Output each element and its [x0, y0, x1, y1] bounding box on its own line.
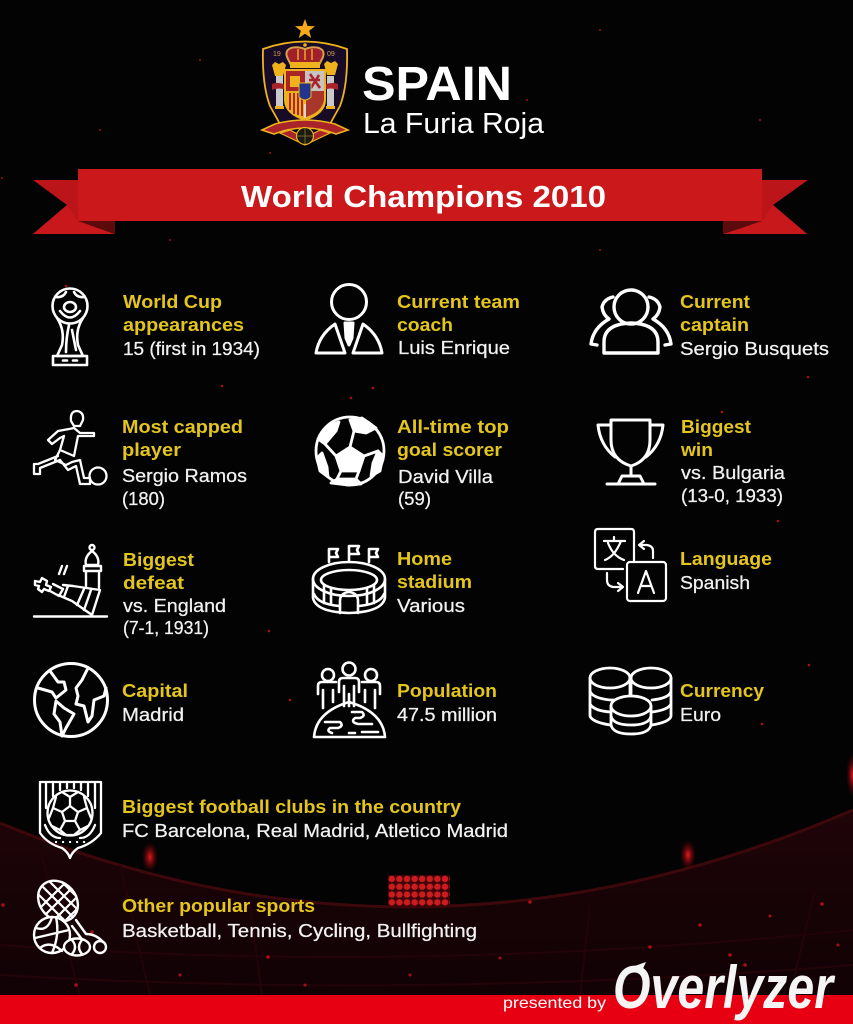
- icon: cup: [598, 420, 663, 484]
- item: world cup appearances: World Cup: [123, 292, 222, 312]
- icon: globe: [34, 664, 108, 736]
- item: biggest defeat: Biggest: [123, 550, 194, 570]
- item: population: 47.5 million: [397, 705, 497, 725]
- icon: football: [316, 417, 384, 485]
- icon: star: [295, 19, 315, 38]
- crest: Spain football federation: 19: [273, 51, 281, 58]
- item: biggest win: (13-0, 1933): [681, 486, 783, 506]
- item: biggest football clubs: FC Barcelona, Real Madrid, Atletico Madrid: [122, 821, 508, 841]
- item: home stadium: [313, 546, 472, 616]
- item: current captain: captain: [680, 315, 749, 335]
- item: other popular sports: Other popular sports: [122, 896, 315, 916]
- item: current captain: Sergio Busquets: [680, 339, 829, 359]
- icon: coin stacks: [590, 668, 671, 734]
- item: biggest football clubs: [40, 782, 508, 858]
- item: biggest football clubs: Biggest football clubs in the country: [122, 797, 461, 817]
- item: biggest win: Biggest: [681, 417, 751, 437]
- item: language: Language: [680, 549, 772, 569]
- presented by: presented by: [503, 995, 606, 1012]
- banner heading: World Champions 2010: [241, 179, 606, 214]
- item: all-time top goal scorer: [316, 417, 509, 509]
- item: home stadium: Home: [397, 549, 452, 569]
- item: language: Spanish: [680, 573, 750, 593]
- icon: footballer kicking: [34, 411, 106, 484]
- item: home stadium: Various: [397, 596, 465, 616]
- item: current captain: [591, 290, 829, 359]
- icon: group of people: [591, 290, 671, 353]
- item: other popular sports: Basketball, Tennis, Cycling, Bullfighting: [122, 921, 477, 941]
- item: population: Population: [397, 681, 497, 701]
- item: capital: Capital: [122, 681, 188, 701]
- icon: fallen chess king: [34, 545, 107, 616]
- item: language: [595, 529, 772, 601]
- item: home stadium: stadium: [397, 572, 472, 592]
- item: current captain: Current: [680, 292, 750, 312]
- icon: translate: [595, 529, 666, 601]
- item: biggest defeat: [34, 545, 226, 638]
- item: current team coach: [316, 284, 520, 358]
- item: all-time top goal scorer: (59): [398, 489, 431, 509]
- subtitle: La Furia Roja: [363, 108, 545, 140]
- item: most capped player: [34, 411, 247, 509]
- item: biggest win: [598, 417, 786, 506]
- item: most capped player: player: [122, 440, 181, 460]
- title: [362, 58, 545, 140]
- item: most capped player: Sergio Ramos: [122, 466, 247, 486]
- item: biggest defeat: defeat: [123, 573, 184, 593]
- footer bar: [0, 954, 853, 1024]
- item: world cup appearances: [52, 288, 260, 365]
- icon: stadium: [313, 546, 385, 613]
- item: currency: Euro: [680, 705, 721, 725]
- item: biggest defeat: (7-1, 1931): [123, 618, 209, 638]
- icon: racket and balls: [30, 873, 106, 956]
- item: current team coach: Current team: [397, 292, 520, 312]
- item: biggest win: vs. Bulgaria: [681, 463, 786, 483]
- item: most capped player: Most capped: [122, 417, 243, 437]
- item: world cup appearances: appearances: [123, 315, 244, 335]
- item: capital: [34, 664, 188, 736]
- item: currency: [590, 668, 764, 734]
- icon: world cup trophy: [52, 288, 88, 365]
- banner ribbon: [33, 169, 808, 234]
- item: currency: Currency: [680, 681, 764, 701]
- icon: coach in suit: [316, 284, 382, 353]
- icon: people on a globe: [314, 662, 385, 737]
- icon: club shield with ball: [40, 782, 101, 858]
- item: capital: Madrid: [122, 705, 184, 725]
- item: all-time top goal scorer: goal scorer: [397, 440, 502, 460]
- item: biggest defeat: vs. England: [123, 596, 226, 616]
- item: other popular sports: [30, 873, 477, 956]
- item: world cup appearances: 15 (first in 1934): [123, 339, 260, 359]
- item: all-time top goal scorer: All-time top: [397, 417, 509, 437]
- item: all-time top goal scorer: David Villa: [398, 467, 494, 487]
- item: most capped player: (180): [122, 489, 165, 509]
- item: biggest win: win: [680, 440, 713, 460]
- item: population: [314, 662, 497, 737]
- title: SPAIN: [362, 58, 512, 111]
- crest: Spain football federation: [262, 19, 348, 145]
- item: current team coach: Luis Enrique: [398, 338, 510, 358]
- crest: Spain football federation: 09: [327, 51, 335, 58]
- item: current team coach: coach: [397, 315, 453, 335]
